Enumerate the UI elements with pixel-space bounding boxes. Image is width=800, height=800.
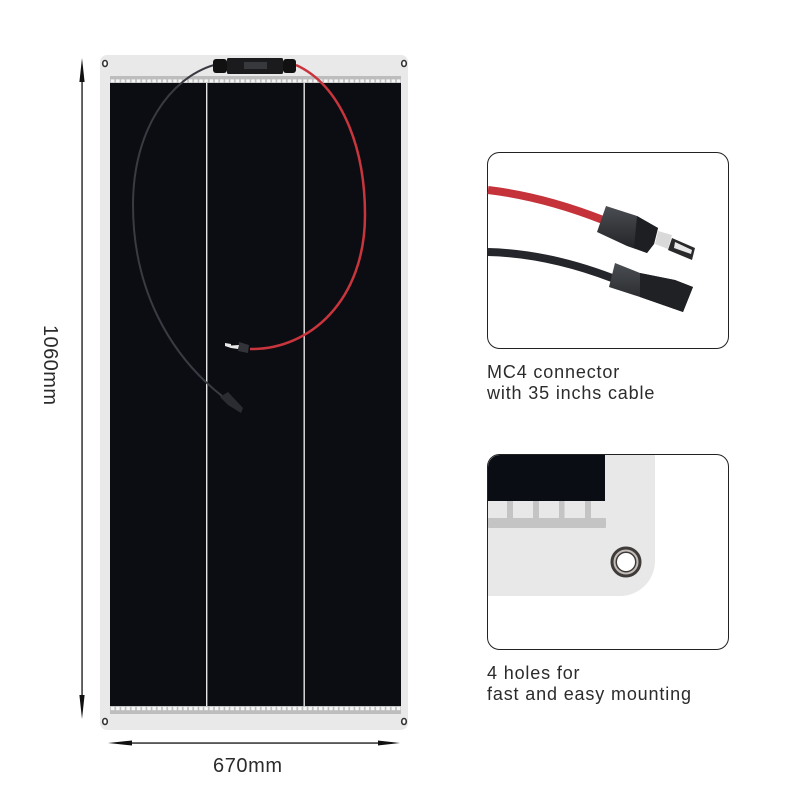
cell divider left	[206, 83, 207, 706]
dark solar cell area	[110, 83, 401, 706]
cell divider right	[304, 83, 305, 706]
top busbar strip	[110, 76, 401, 83]
width arrow	[108, 740, 400, 746]
red connector plug	[225, 342, 249, 353]
height arrow	[79, 58, 85, 719]
mounting caption: fast and easy mounting	[487, 684, 692, 704]
mounting hole photo card	[488, 454, 728, 650]
sheet corner	[488, 454, 655, 596]
width label: 670mm	[213, 755, 282, 777]
black cable	[133, 65, 222, 396]
busbar	[488, 501, 606, 528]
bottom busbar strip	[110, 706, 401, 714]
grommet	[614, 550, 638, 574]
male connector	[597, 206, 695, 260]
female connector	[609, 263, 693, 312]
connector caption: MC4 connector	[487, 362, 620, 382]
red cable	[488, 190, 603, 220]
height label: 1060mm	[39, 325, 61, 405]
black cable	[488, 252, 612, 278]
black connector plug	[220, 392, 243, 413]
panel backing sheet	[100, 55, 408, 730]
cell corner	[488, 454, 605, 501]
solar panel	[100, 55, 408, 730]
connector photo card	[488, 152, 728, 348]
mounting holes	[103, 60, 406, 724]
mounting caption: 4 holes for	[487, 663, 580, 683]
junction box	[213, 58, 296, 74]
connector caption: with 35 inchs cable	[486, 383, 655, 403]
red cable	[250, 65, 365, 349]
